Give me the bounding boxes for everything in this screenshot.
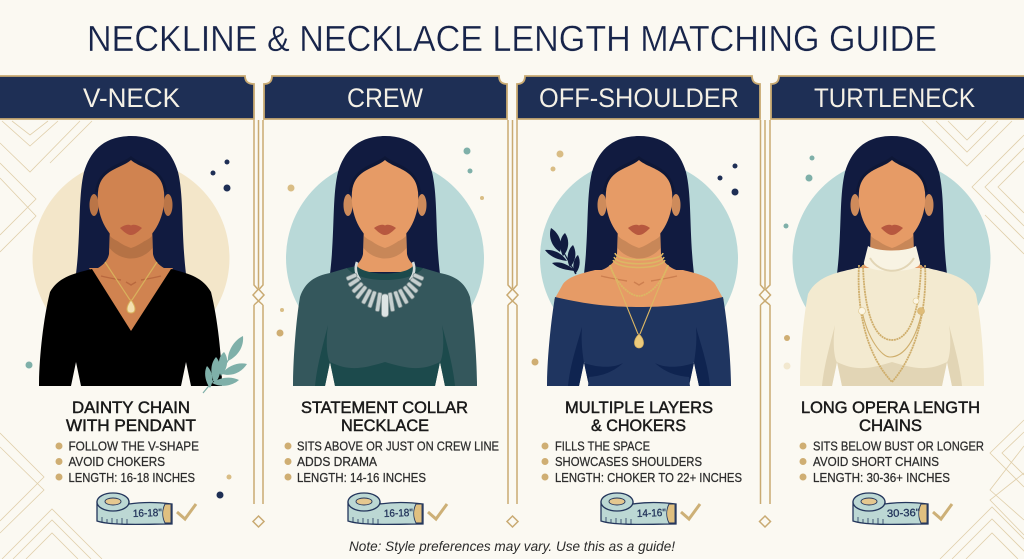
header: V-neck [0, 76, 254, 119]
bullet list: SITS ABOVE OR JUST ON CREW LINE [297, 438, 499, 454]
decorative corner: bottom left [0, 433, 102, 559]
bullet list: FOLLOW THE V-SHAPE [68, 438, 199, 454]
bullet list: AVOID CHOKERS [68, 454, 165, 469]
heading: multiple layers and chokers [565, 398, 713, 435]
heading: long opera length chains: LONG OPERA LENGTH [801, 398, 980, 417]
header: Turtleneck: TURTLENECK [814, 83, 975, 113]
bullet list: AVOID SHORT CHAINS [813, 454, 939, 469]
figure: woman in navy off-shoulder top [547, 136, 731, 386]
decorative corner: top left [0, 121, 92, 252]
bullet list: LENGTH: 14-16 INCHES [297, 470, 426, 485]
heading: dainty chain with pendant: WITH PENDANT [66, 416, 196, 435]
bullet list: LENGTH: CHOKER TO 22+ INCHES [555, 470, 742, 485]
icon: navy leaf sprig [545, 228, 580, 274]
panel: Crew [264, 76, 507, 524]
header: Crew [264, 76, 507, 119]
accent dots [532, 150, 738, 366]
bullet list: SHOWCASES SHOULDERS [555, 454, 702, 469]
torso [547, 297, 731, 386]
bullet list: LENGTH: 16-18 INCHES [68, 470, 195, 485]
panel: V-neck [0, 76, 254, 524]
header: V-neck: V-NECK [83, 83, 180, 113]
footer note: Note: Style preferences may vary. Use this as a guide! [349, 538, 675, 554]
icon: measuring tape with check [348, 493, 447, 524]
decorative corner: top right [922, 121, 1024, 254]
heading: multiple layers and chokers: MULTIPLE LAYERS [565, 398, 713, 417]
bullet list [542, 438, 742, 485]
icon: measuring tape with check [601, 493, 700, 524]
divider rail 3 [760, 120, 770, 527]
background circle [540, 159, 738, 357]
figure: woman in teal crew neck [293, 136, 477, 386]
decorative corner: bottom right [940, 420, 1024, 559]
heading: statement collar necklace: STATEMENT COLLAR [301, 398, 468, 417]
icon: measuring tape with check: 16-18" [133, 507, 162, 520]
divider rail 1 [253, 120, 264, 527]
heading: dainty chain with pendant: DAINTY CHAIN [72, 398, 190, 417]
torso [39, 269, 222, 386]
heading: long opera length chains [801, 398, 980, 435]
panel: Turtleneck [771, 76, 1024, 524]
bullet list: ADDS DRAMA [297, 454, 377, 469]
heading: statement collar necklace: NECKLACE [341, 416, 429, 435]
bullet list: FILLS THE SPACE [555, 438, 650, 454]
torso [293, 268, 477, 386]
torso [800, 268, 984, 386]
divider rail 2 [507, 120, 518, 527]
necklace: layered chains and chokers [610, 253, 668, 348]
heading: statement collar necklace [301, 398, 468, 435]
necklace: statement collar [346, 262, 424, 317]
accent dots [276, 148, 484, 336]
accent dots [26, 160, 232, 498]
turtleneck collar [864, 246, 920, 271]
bullet list [284, 438, 499, 485]
heading: dainty chain with pendant [66, 398, 196, 435]
background circle [286, 159, 484, 357]
bullet list [56, 438, 199, 485]
necklace: dainty chain with pendant [105, 262, 157, 313]
necklace: long opera chains [858, 265, 925, 382]
panel: Off-shoulder [517, 76, 760, 524]
title: NECKLINE & NECKLACE LENGTH MATCHING GUIDE [87, 18, 937, 59]
header: Off-shoulder: OFF-SHOULDER [539, 83, 739, 113]
figure: woman in cream turtleneck [800, 136, 984, 386]
header: Off-shoulder [517, 76, 760, 119]
header: Turtleneck [771, 76, 1024, 119]
background circle [792, 159, 990, 357]
icon: measuring tape with check [97, 493, 196, 524]
heading: multiple layers and chokers: & CHOKERS [591, 416, 686, 435]
accent dots [784, 156, 814, 370]
bullet list [800, 438, 984, 485]
header: Crew: CREW [347, 83, 423, 113]
background circle [32, 160, 230, 356]
heading: long opera length chains: CHAINS [859, 416, 922, 435]
figure: woman in black V-neck [39, 136, 222, 386]
bullet list: LENGTH: 30-36+ INCHES [813, 470, 950, 485]
icon: measuring tape with check [853, 493, 952, 524]
icon: measuring tape with check: 16-18" [384, 507, 413, 520]
icon: measuring tape with check: 14-16" [637, 507, 666, 520]
bullet list: SITS BELOW BUST OR LONGER [813, 438, 984, 454]
icon: measuring tape with check: 30-36" [887, 507, 920, 520]
icon: teal leaf sprig [203, 336, 247, 393]
